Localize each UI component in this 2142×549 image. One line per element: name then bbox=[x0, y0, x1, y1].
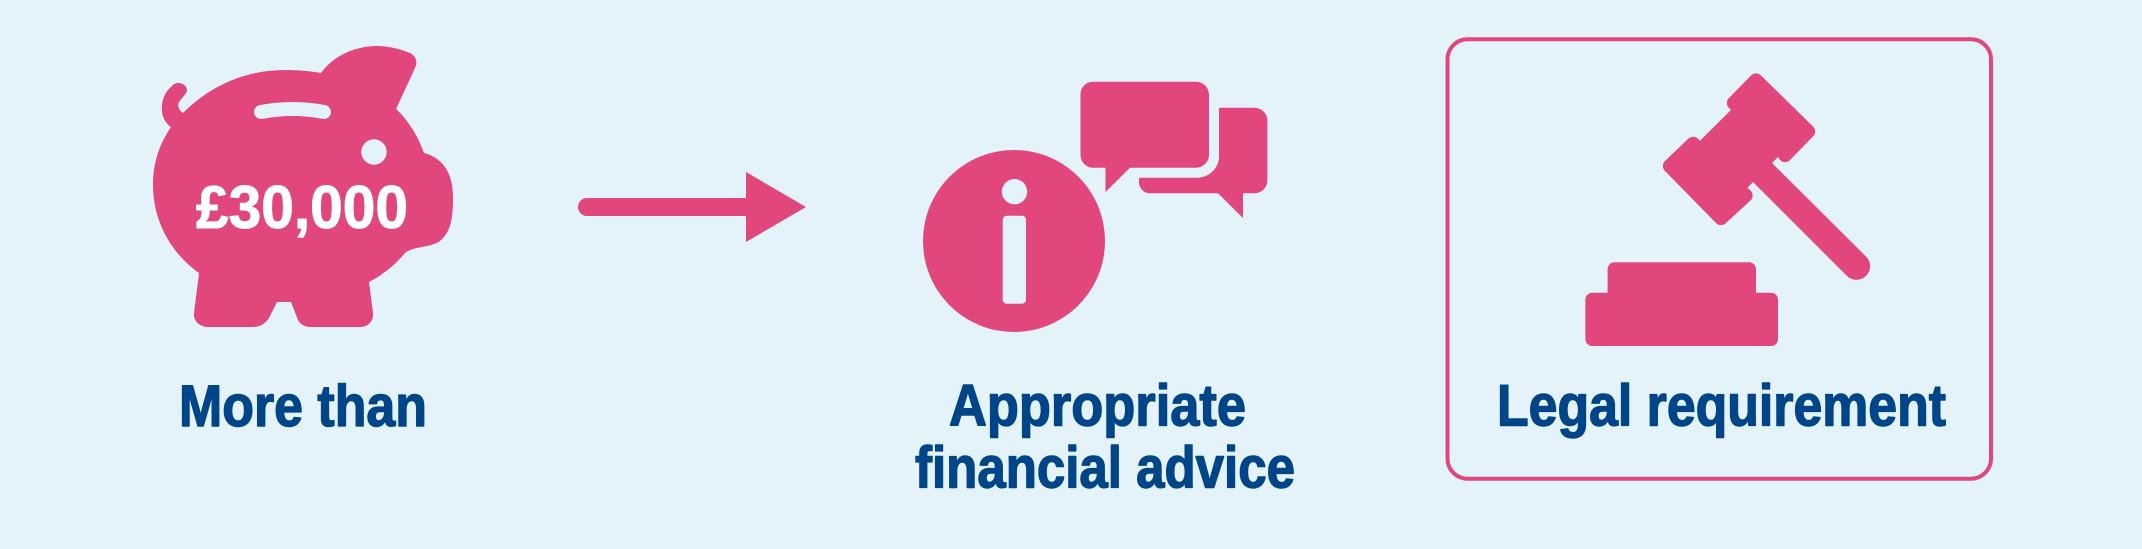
label: appropriate financial advice: Appropriate bbox=[949, 374, 1246, 439]
amount: £30,000 bbox=[196, 174, 408, 241]
panel: legal requirement frame bbox=[1448, 39, 1991, 479]
icon: information circle with speech bubbles bbox=[923, 82, 1267, 332]
label: appropriate financial advice bbox=[915, 374, 1295, 501]
label: legal requirement: Legal requirement bbox=[1497, 374, 1946, 439]
label: more than: More than bbox=[179, 374, 427, 439]
icon: piggy bank with £30,000 bbox=[153, 46, 453, 327]
arrow bbox=[578, 172, 806, 242]
label: appropriate financial advice: financial advice bbox=[915, 436, 1295, 501]
icon: gavel and block bbox=[1585, 73, 1870, 346]
